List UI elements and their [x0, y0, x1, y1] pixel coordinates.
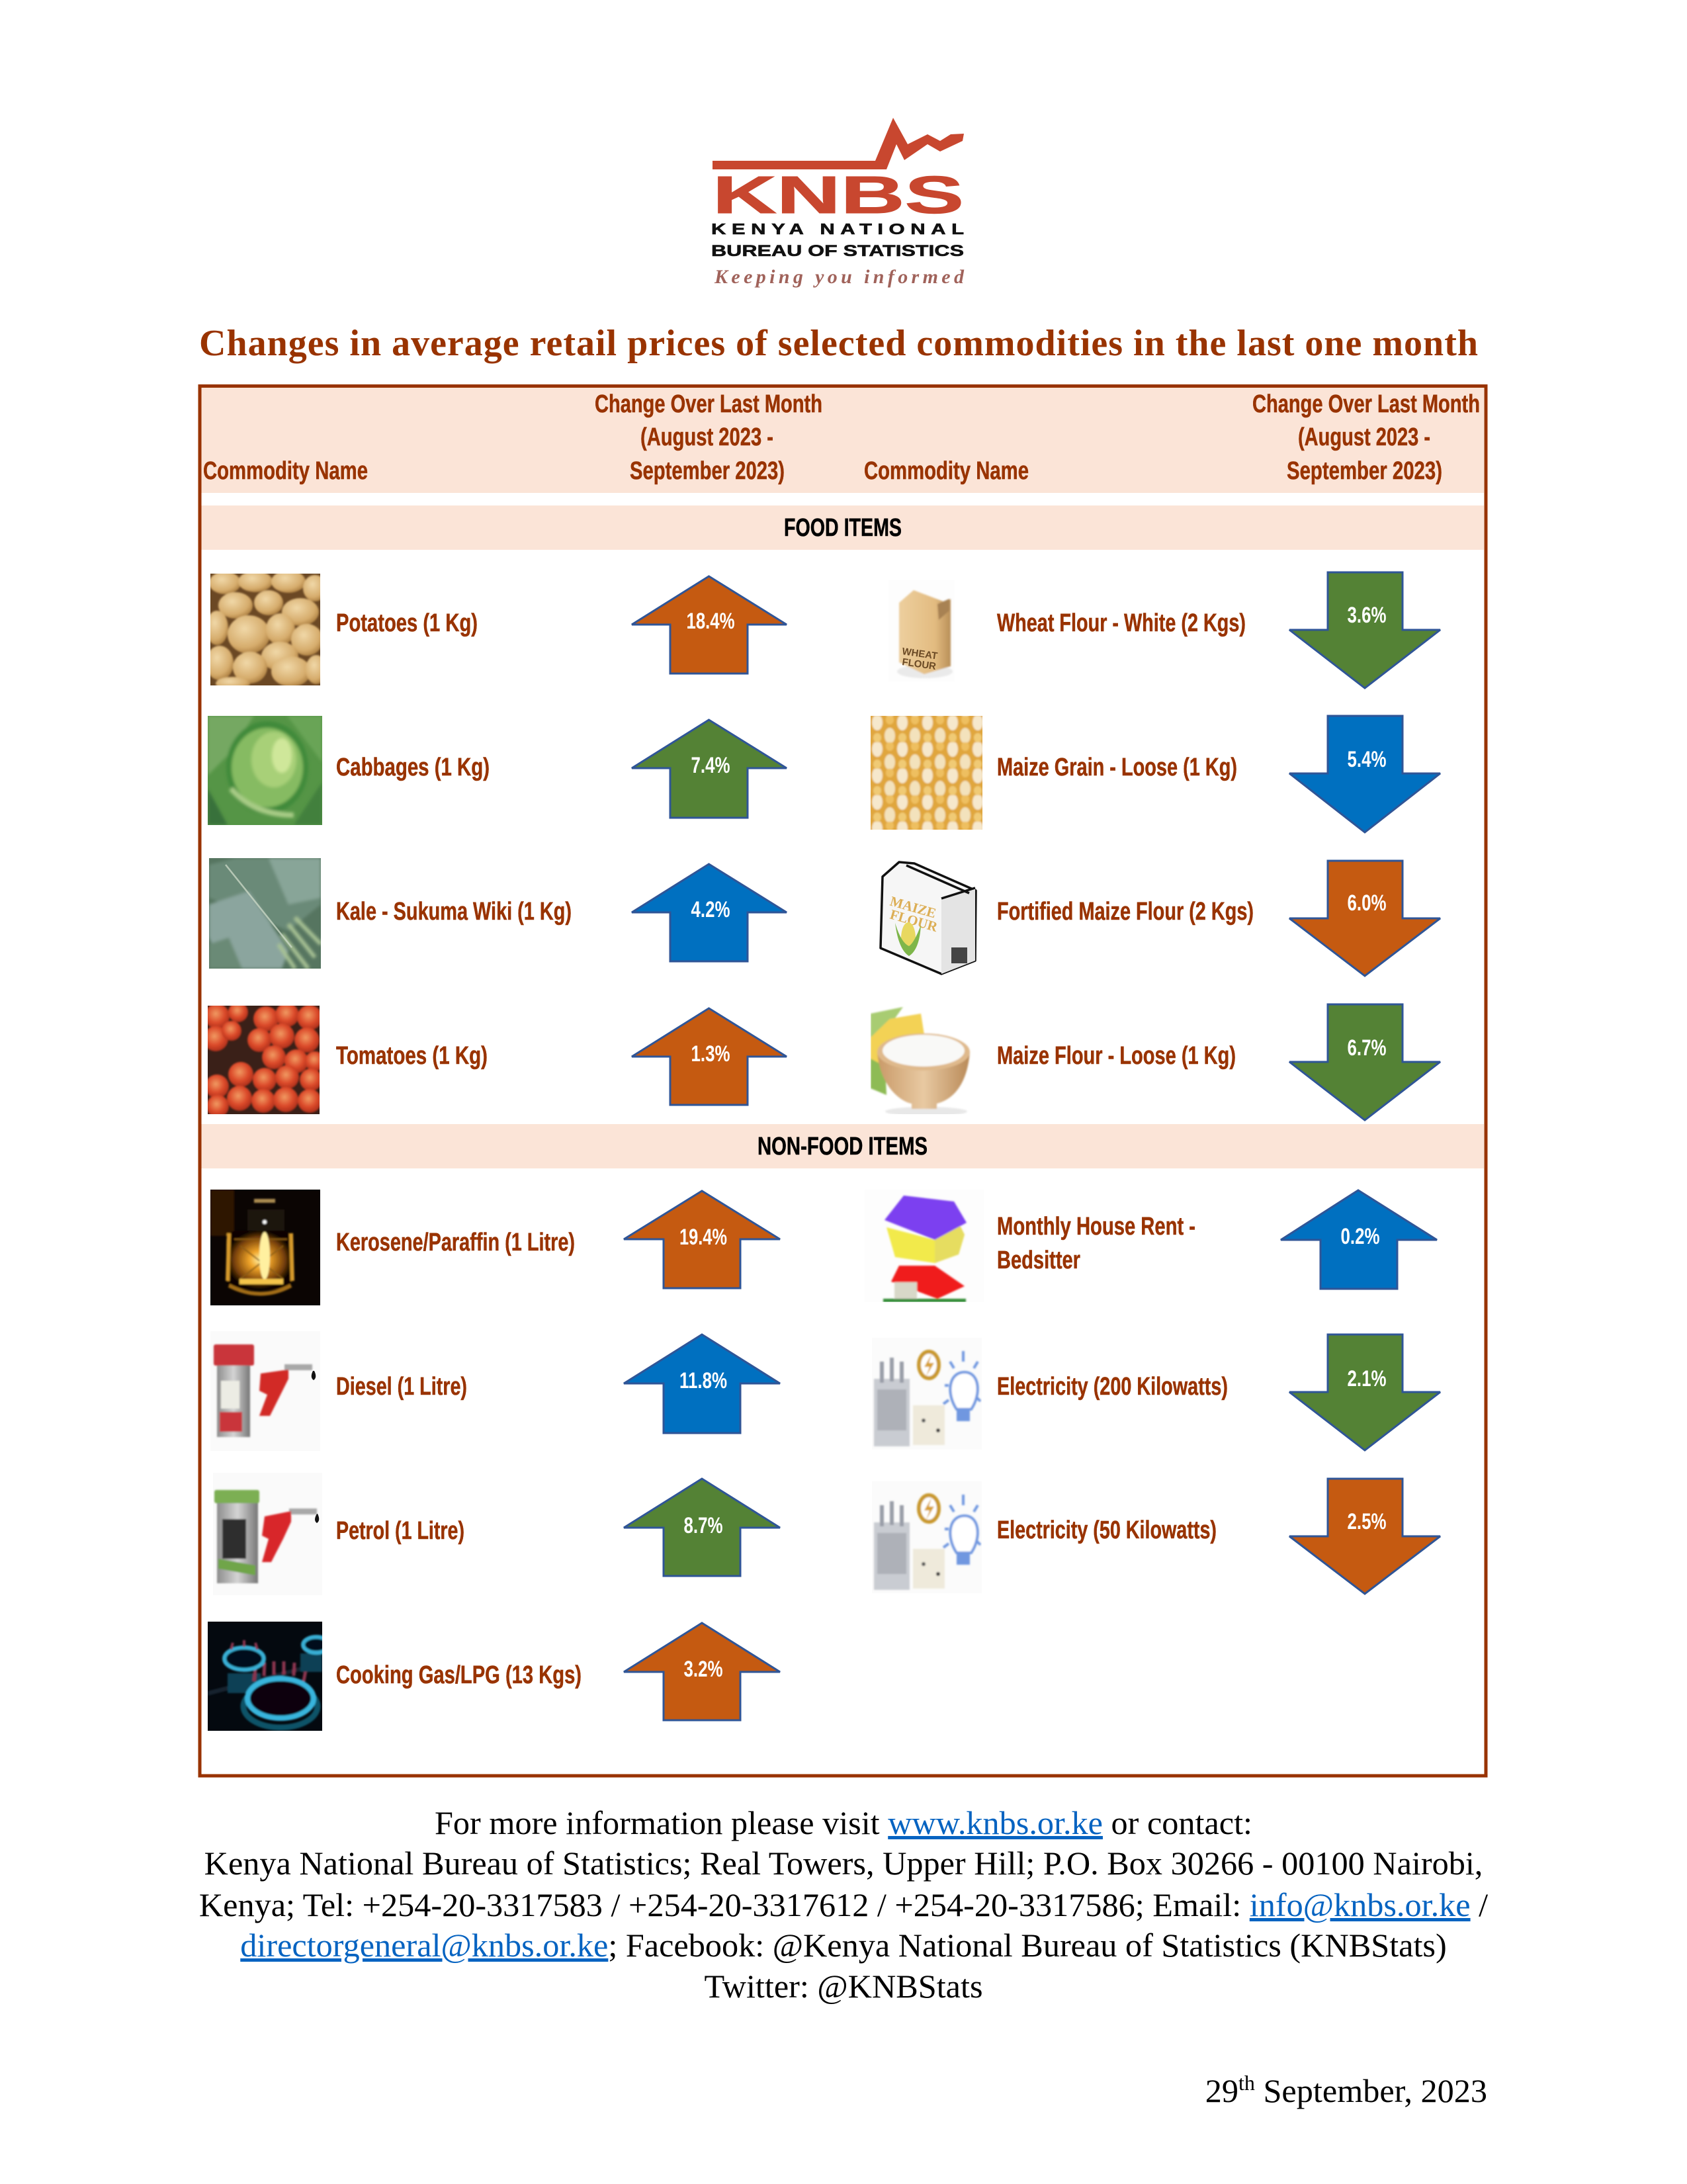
arrow: up 18.4%: [632, 576, 787, 674]
image: wheat flour bag: WHEAT: [901, 646, 938, 662]
arrow: up 8.7%: 8.7%: [684, 1513, 722, 1538]
label: house rent: Bedsitter: [997, 1246, 1080, 1274]
logo trend line: [713, 118, 964, 169]
arrow: up 4.2%: [632, 864, 787, 961]
label: house rent: [997, 1213, 1195, 1274]
row: maize flour loose: [871, 1004, 1440, 1120]
logo name line two: BUREAU OF STATISTICS: [711, 242, 964, 260]
image: cabbage: [208, 716, 322, 825]
image: electricity: [873, 1348, 982, 1448]
arrow: down 5.4%: 5.4%: [1347, 747, 1387, 772]
row: electricity 50 kilowatts: [872, 1479, 1440, 1594]
label: tomatoes: Tomatoes (1 Kg): [336, 1042, 488, 1070]
image: potatoes: [210, 574, 320, 685]
image: maize grain: [871, 716, 982, 830]
footer contact block: directorgeneral@knbs.or.ke; Facebook: @Kenya National Bureau of Statistics (KNBStats): [240, 1927, 1447, 1964]
arrow: up 3.2%: [624, 1623, 780, 1720]
label: electricity 200: Electricity (200 Kilowatts): [997, 1373, 1228, 1401]
row: electricity 200 kilowatts: [872, 1334, 1440, 1450]
arrow: down 6.0%: [1289, 861, 1440, 976]
image: gas burners: [208, 1622, 322, 1731]
arrow: up 18.4%: 18.4%: [687, 609, 734, 634]
footer contact block: [199, 1804, 1488, 2005]
row: wheat flour: [888, 572, 1440, 688]
date: September, 2023: [1255, 2072, 1487, 2109]
row: potatoes: [206, 570, 787, 690]
section band: food items: [201, 505, 1484, 550]
label: petrol: Petrol (1 Litre): [336, 1517, 464, 1545]
arrow: up 19.4%: 19.4%: [679, 1225, 727, 1250]
logo letters: KNBS: [713, 165, 964, 224]
image: maize flour bag: [879, 861, 977, 975]
label: maize grain: Maize Grain - Loose (1 Kg): [997, 754, 1237, 781]
table frame: [200, 386, 1486, 1776]
image: maize and flour bowl: [871, 1006, 971, 1114]
label: electricity 50: Electricity (50 Kilowatts): [997, 1516, 1217, 1544]
arrow: up 0.2%: 0.2%: [1340, 1224, 1380, 1249]
footer contact block: Twitter: @KNBStats: [704, 1968, 983, 2005]
label: diesel: Diesel (1 Litre): [336, 1373, 467, 1401]
section band: non-food items: [201, 1124, 1484, 1168]
image: electricity: [873, 1491, 982, 1591]
section band: food items: FOOD ITEMS: [784, 514, 902, 542]
header: left change column: Change Over Last Month: [595, 390, 822, 418]
row: fortified maize flour: [871, 860, 1440, 977]
arrow: down 2.5%: [1289, 1479, 1440, 1594]
arrow: down 3.6%: [1289, 572, 1440, 688]
table header band: [201, 388, 1484, 493]
row: kerosene: [210, 1190, 780, 1305]
logo name line one: KENYA NATIONAL: [711, 220, 964, 238]
header: right change column: (August 2023 -: [1298, 423, 1430, 451]
arrow: down 6.7%: 6.7%: [1347, 1035, 1387, 1061]
arrow: up 11.8%: [624, 1334, 780, 1433]
header: right change column: September 2023): [1287, 457, 1442, 485]
label: kale: Kale - Sukuma Wiki (1 Kg): [336, 898, 572, 926]
header: left change column: September 2023): [630, 457, 785, 485]
image: petrol pump: [213, 1489, 319, 1585]
label: house rent: Monthly House Rent -: [997, 1213, 1195, 1241]
arrow: down 2.1%: 2.1%: [1347, 1366, 1387, 1391]
header: left change column: (August 2023 -: [640, 423, 773, 451]
image: maize flour bag: MAIZE: [888, 893, 938, 921]
label: wheat flour: Wheat Flour - White (2 Kgs): [997, 609, 1246, 637]
image: wheat flour bag: [897, 589, 953, 679]
arrow: down 2.1%: [1289, 1334, 1440, 1450]
row: diesel: [210, 1331, 780, 1451]
title: Changes in average retail prices of selected commodities in the last one month: [199, 323, 1478, 364]
label: kerosene: Kerosene/Paraffin (1 Litre): [336, 1229, 575, 1256]
label: cooking gas: Cooking Gas/LPG (13 Kgs): [336, 1661, 582, 1689]
footer contact block: For more information please visit www.knbs.or.ke or contact:: [435, 1804, 1252, 1841]
header: right change column: Change Over Last Month: [1252, 390, 1480, 418]
footer contact block: Kenya National Bureau of Statistics; Real Towers, Upper Hill; P.O. Box 30266 - 00100 Nairobi,: [204, 1845, 1483, 1882]
row: tomatoes: [203, 1002, 787, 1117]
date: 29: [1205, 2072, 1238, 2109]
image: maize flour bag: FLOUR: [888, 906, 940, 935]
image: wheat flour bag: FLOUR: [901, 656, 937, 672]
label: maize flour loose: Maize Flour - Loose (1 Kg): [997, 1042, 1236, 1070]
label: cabbages: Cabbages (1 Kg): [336, 754, 490, 781]
arrow: up 1.3%: [632, 1008, 787, 1105]
image: diesel pump: [212, 1343, 316, 1438]
arrow: up 4.2%: 4.2%: [691, 897, 730, 922]
arrow: up 0.2%: [1281, 1190, 1437, 1289]
arrow: up 1.3%: 1.3%: [691, 1041, 730, 1067]
arrow: up 8.7%: [624, 1479, 780, 1576]
panel: commodity price table: [200, 386, 1486, 1776]
arrow: down 6.7%: [1289, 1004, 1440, 1120]
image: tomatoes: [208, 1006, 320, 1114]
row: house rent: [865, 1190, 1437, 1302]
arrow: up 3.2%: 3.2%: [684, 1657, 722, 1682]
image: kale: [209, 858, 321, 969]
arrow: down 5.4%: [1289, 716, 1440, 832]
header: left change column: [595, 390, 822, 485]
row: kale: [209, 858, 787, 969]
header: right commodity name: Commodity Name: [864, 457, 1029, 485]
row: cooking gas: [208, 1622, 780, 1731]
header: right change column: [1252, 390, 1480, 485]
arrow: up 7.4%: 7.4%: [691, 753, 730, 778]
image: rent house: [881, 1194, 967, 1302]
label: potatoes: Potatoes (1 Kg): [336, 609, 478, 637]
arrow: up 7.4%: [632, 720, 787, 818]
row: maize grain: [867, 712, 1440, 834]
arrow: down 6.0%: 6.0%: [1347, 891, 1387, 916]
arrow: up 19.4%: [624, 1191, 780, 1288]
row: petrol: [213, 1473, 780, 1595]
arrow: down 3.6%: 3.6%: [1347, 603, 1387, 628]
logo: KNBS: [711, 118, 965, 288]
arrow: down 2.5%: 2.5%: [1347, 1509, 1387, 1534]
date: th: [1238, 2071, 1255, 2095]
row: cabbages: [208, 716, 787, 825]
section band: non-food items: NON-FOOD ITEMS: [757, 1133, 928, 1160]
arrow: up 11.8%: 11.8%: [679, 1368, 727, 1393]
label: fortified maize flour: Fortified Maize Flour (2 Kgs): [997, 898, 1254, 926]
logo tagline: Keeping you informed: [714, 266, 965, 288]
image: kerosene lantern: [210, 1190, 320, 1305]
footer contact block: Kenya; Tel: +254-20-3317583 / +254-20-3317612 / +254-20-3317586; Email: info@knbs.or.ke /: [199, 1886, 1488, 1923]
header: left commodity name: Commodity Name: [203, 457, 368, 485]
